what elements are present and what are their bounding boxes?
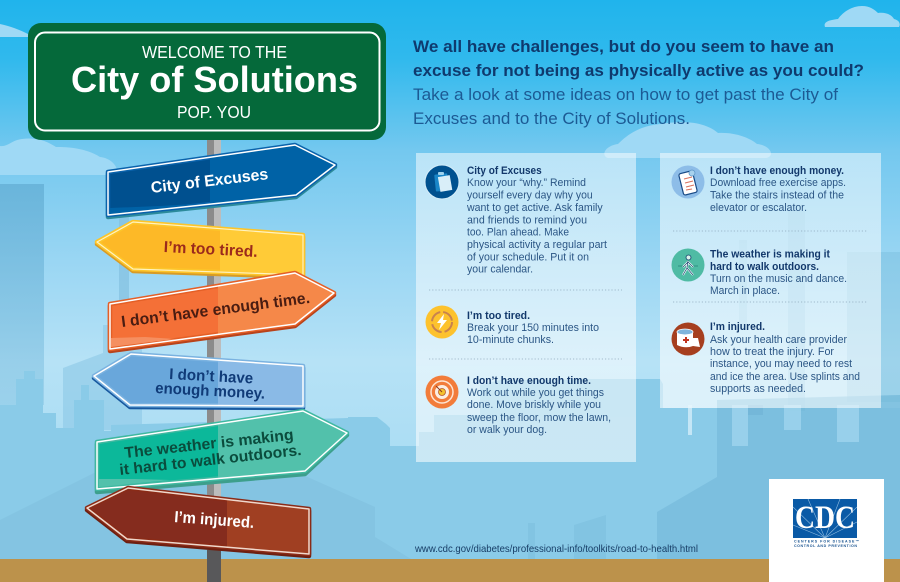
item: I'm injured: and ice the area. Use splints and	[710, 371, 860, 383]
arrow sign: I'm too tired	[97, 222, 303, 277]
arrow sign: the weather: The weather is making	[124, 427, 294, 462]
item: I don't have enough money: I don’t have enough money.	[710, 165, 844, 177]
arrow sign: I don't have enough money: enough money.	[155, 380, 266, 403]
icon: clipboard	[425, 165, 459, 199]
intro heading: Excuses and to the City of Solutions.	[413, 110, 690, 128]
item: the weather: March in place.	[710, 285, 780, 297]
sign text: population: POP. YOU	[177, 102, 251, 122]
item: I'm injured: instance, you may need to rest	[710, 358, 852, 370]
intro heading: We all have challenges, but do you seem to have an	[413, 38, 834, 56]
arrow sign: the weather	[97, 411, 347, 492]
item: I'm injured: supports as needed.	[710, 383, 806, 395]
item: City of Excuses: and friends to remind you	[467, 214, 587, 226]
sign text: welcome: WELCOME TO THE	[142, 42, 287, 62]
arrow sign: I don't have enough money	[94, 354, 303, 408]
item: I'm injured	[672, 321, 860, 395]
sign text: City of Solutions: City of Solutions	[71, 59, 358, 100]
item: City of Excuses: yourself every day why you	[467, 190, 593, 202]
sign: welcome to the City of Solutions	[28, 23, 386, 140]
item: City of Excuses: of your schedule. Put it on	[467, 251, 589, 263]
arrow sign: I'm injured: I’m injured.	[174, 509, 255, 532]
item: the weather: The weather is making it	[710, 248, 830, 260]
arrow sign: I don't have enough money: I don’t have	[169, 366, 254, 387]
item: I don't have enough money: Take the stairs instead of the	[710, 190, 844, 202]
item: I don't have enough money: elevator or escalator.	[710, 202, 807, 214]
arrow sign: City of Excuses: City of Excuses	[150, 166, 269, 197]
icon: target	[426, 376, 458, 408]
item: I don't have enough time: or walk your dog.	[467, 424, 547, 436]
icon: energy	[426, 306, 458, 338]
intro heading: excuse for not being as physically active as you could?	[413, 62, 864, 80]
item: I don't have enough time: Work out while you get things	[467, 387, 604, 399]
panel: left solutions	[416, 153, 636, 462]
arrow sign: I'm injured	[87, 488, 309, 556]
item: City of Excuses: your calendar.	[467, 264, 533, 276]
arrow sign: I don't have enough time: I don’t have enough time.	[120, 290, 311, 331]
item: I'm injured: I’m injured.	[710, 321, 765, 333]
item: City of Excuses	[425, 165, 607, 276]
item: I don't have enough time	[426, 375, 611, 436]
arrow sign: I don't have enough time	[110, 273, 334, 351]
logo: CDC: CENTERS FOR DISEASE™	[794, 540, 859, 544]
background: clouds	[0, 6, 900, 175]
item: I'm too tired: Break your 150 minutes into	[467, 322, 599, 334]
panel: right solutions	[660, 153, 881, 408]
icon: bandage	[672, 322, 704, 356]
item: I'm too tired: I’m too tired.	[467, 310, 530, 322]
item: I don't have enough time: sweep the floor, mow the lawn,	[467, 412, 611, 424]
item: I'm too tired	[426, 306, 599, 346]
ground	[0, 559, 900, 582]
item: City of Excuses: Know your “why.” Remind	[467, 177, 586, 189]
item: the weather	[672, 248, 847, 297]
item: I'm injured: how to treat the injury. For	[710, 346, 834, 358]
intro heading: Take a look at some ideas on how to get past the City of	[413, 86, 838, 104]
item: City of Excuses: City of Excuses	[467, 165, 542, 177]
item: I'm too tired: 10-minute chunks.	[467, 334, 554, 346]
item: the weather: Turn on the music and dance.	[710, 273, 847, 285]
logo: CDC	[793, 499, 859, 548]
icon: walking person	[672, 248, 704, 282]
logo: CDC: CONTROL AND PREVENTION	[794, 544, 857, 548]
item: City of Excuses: want to get active. Ask family	[466, 202, 603, 214]
arrow sign: City of Excuses	[108, 145, 335, 217]
item: I don't have enough time: done. Move briskly while you	[467, 399, 601, 411]
item: City of Excuses: physical activity a regular part	[467, 239, 607, 251]
background: skyline	[0, 184, 900, 559]
item: City of Excuses: too. Plan ahead. Make	[467, 227, 569, 239]
item: I don't have enough money: Download free exercise apps.	[710, 177, 846, 189]
item: the weather: hard to walk outdoors.	[710, 261, 819, 273]
signpost	[207, 140, 221, 582]
item: I'm injured: Ask your health care provider	[710, 334, 847, 346]
item: I don't have enough money	[672, 165, 846, 214]
arrow sign: the weather: it hard to walk outdoors.	[119, 442, 302, 479]
logo: CDC: CDC	[795, 500, 855, 536]
arrow sign: I'm too tired: I’m too tired.	[163, 239, 258, 261]
source URL: www.cdc.gov/diabetes/professional-info/toolkits/road-to-health.html	[414, 543, 698, 555]
item: I don't have enough time: I don’t have enough time.	[467, 375, 591, 387]
CDC logo card	[769, 479, 884, 582]
icon: phone app	[672, 166, 704, 198]
intro heading	[413, 38, 864, 128]
